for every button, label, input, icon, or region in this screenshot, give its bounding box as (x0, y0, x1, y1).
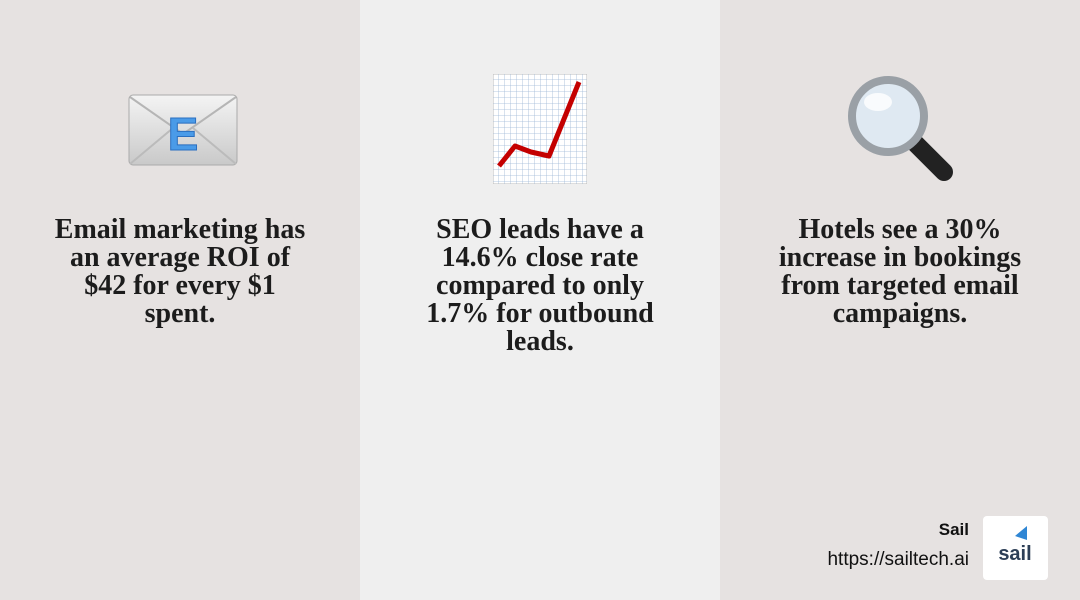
text: SEO stat (426, 214, 654, 357)
text: SEO stat: leads. (506, 326, 574, 357)
icon: chart (493, 74, 587, 184)
panel: SEO (360, 0, 720, 600)
text: hotels stat (779, 214, 1021, 329)
icon: envelope: E (168, 108, 198, 160)
text: SEO stat: compared to only (436, 270, 644, 301)
panel: hotels (720, 0, 1080, 600)
text: hotels stat: Hotels see a 30% (799, 214, 1001, 245)
text: email stat (55, 214, 305, 329)
text: hotels stat: increase in bookings (779, 242, 1021, 273)
text: email stat: spent. (145, 298, 215, 329)
text: SEO stat: 1.7% for outbound (426, 298, 654, 329)
logo: sail (998, 543, 1032, 565)
text: email stat: $42 for every $1 (84, 270, 276, 301)
logo (983, 516, 1048, 580)
text: SEO stat: SEO leads have a (436, 214, 644, 245)
text: hotels stat: from targeted email (781, 270, 1019, 301)
footer: brand (827, 516, 1048, 580)
text: SEO stat: 14.6% close rate (442, 242, 638, 273)
icon: magnifier (848, 76, 953, 181)
brand name: Sail (939, 520, 969, 539)
text: email stat: Email marketing has (55, 214, 305, 245)
text: email stat: an average ROI of (70, 242, 290, 273)
text: hotels stat: campaigns. (833, 298, 967, 329)
panel: email (0, 0, 360, 600)
brand url: https://sailtech.ai (827, 549, 969, 570)
icon: envelope (128, 94, 238, 166)
